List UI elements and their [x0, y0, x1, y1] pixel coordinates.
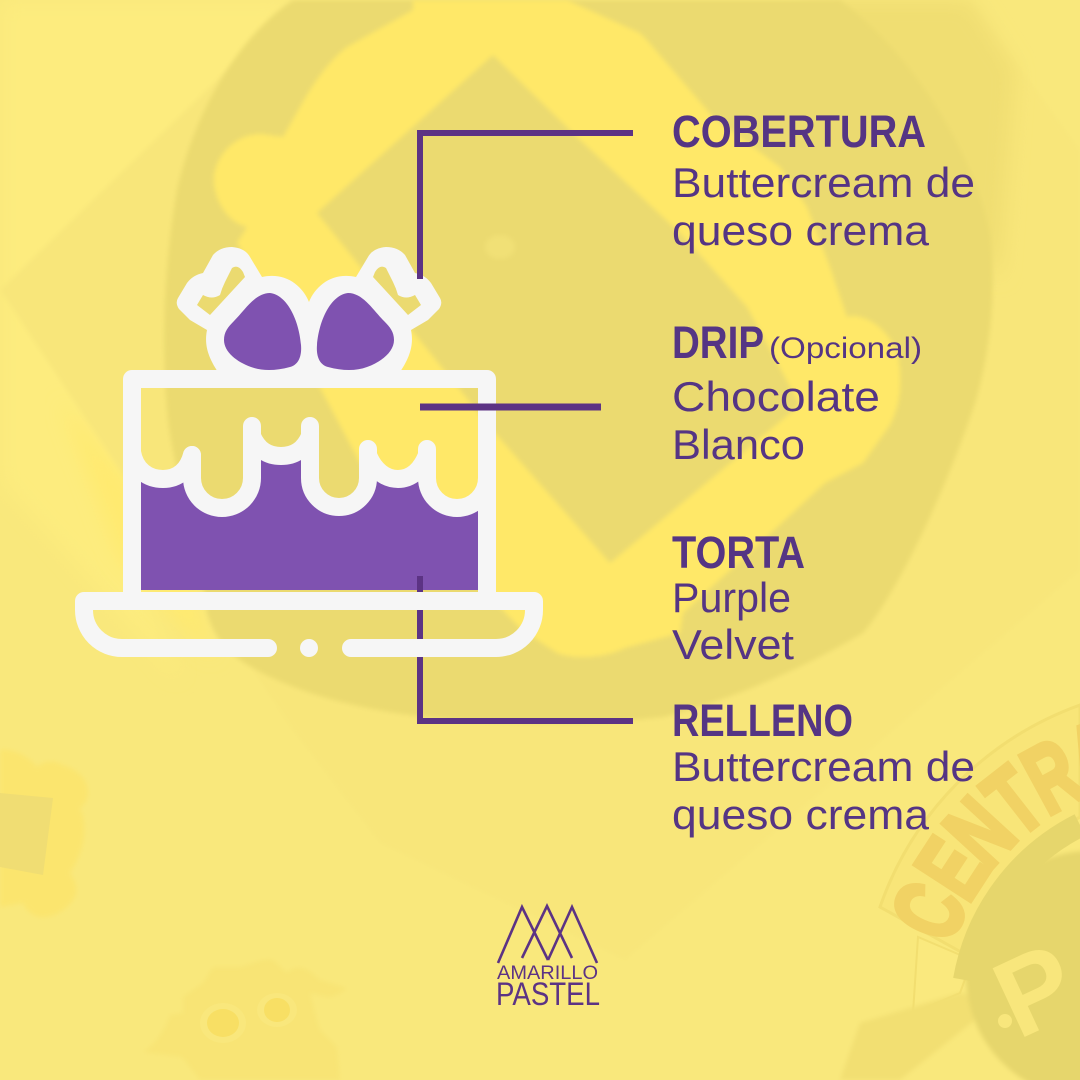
plate [84, 601, 534, 648]
text block: torta [672, 527, 805, 668]
text block: drip: Blanco [672, 421, 805, 468]
connector line: drip [420, 404, 601, 410]
sticker: Central Perk logo: C [872, 869, 988, 954]
text block: cobertura: COBERTURA [672, 106, 926, 157]
text block: torta: Velvet [672, 621, 794, 668]
cake top in photo [164, 0, 993, 723]
connector line: cobertura [420, 133, 633, 279]
logo mark [498, 906, 597, 963]
icon: cake [84, 247, 534, 657]
white outlines [84, 379, 534, 648]
sticker: Central Perk logo [840, 700, 1080, 1080]
connector segment over sponge [417, 576, 423, 592]
sticker: sunglasses hair [143, 959, 347, 1080]
logo: Amarillo Pastel: AMARILLO [497, 963, 598, 984]
sticker: Central Perk logo: T [966, 747, 1063, 856]
sticker: Central Perk logo: N [925, 779, 1035, 886]
sticker: Central Perk logo: E [896, 822, 1009, 916]
text block: relleno: queso crema [672, 791, 930, 838]
logo: Amarillo Pastel [496, 906, 600, 1012]
text block: torta: Purple [672, 574, 791, 621]
strawberries [224, 293, 394, 370]
text block: drip: Chocolate [672, 373, 880, 420]
plate dot [300, 639, 318, 657]
text block: relleno [672, 695, 975, 838]
text block: drip: (Opcional) [769, 332, 922, 365]
logo: Amarillo Pastel: PASTEL [496, 976, 600, 1012]
photo frame in buttercream [214, 0, 900, 657]
strawberries outline and leaves [177, 247, 441, 375]
text block: torta: TORTA [672, 527, 805, 578]
text block: relleno: RELLENO [672, 695, 853, 746]
text block: cobertura [672, 106, 975, 254]
text block: cobertura: queso crema [672, 207, 930, 254]
sticker: frame [0, 750, 88, 917]
text block: drip [672, 317, 922, 468]
text block: relleno: Buttercream de [672, 743, 975, 790]
connector line: relleno [420, 576, 633, 721]
cake sponge fill [135, 450, 487, 590]
text block: cobertura: Buttercream de [672, 159, 975, 206]
text block: drip: DRIP [672, 317, 764, 368]
